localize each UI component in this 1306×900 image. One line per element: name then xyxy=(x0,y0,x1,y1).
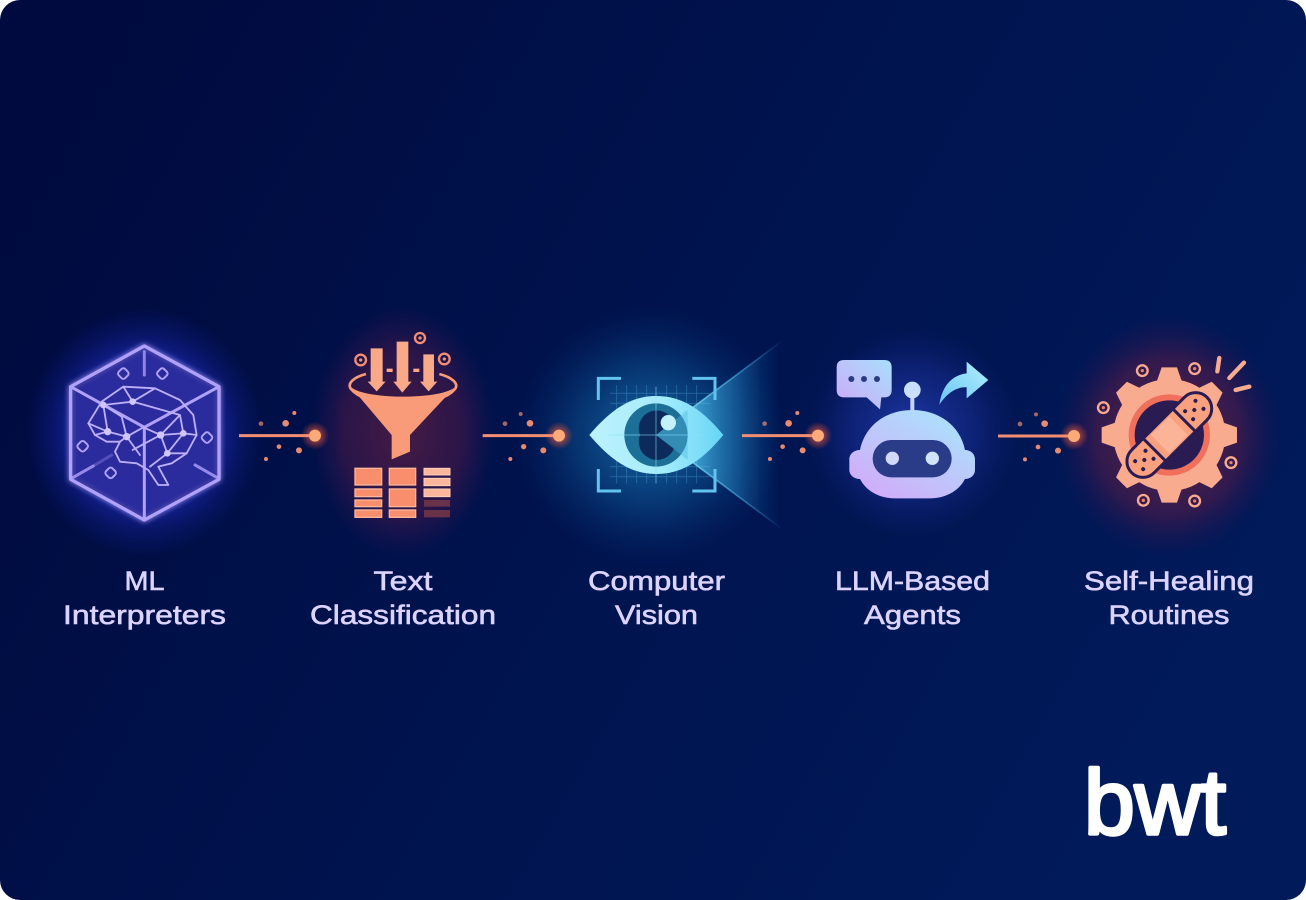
arrow: connector 4 xyxy=(998,412,1088,461)
small rings xyxy=(1098,363,1236,506)
label: Self-Healing Routines: Self-Healing xyxy=(1084,566,1254,596)
icon: brain in cube xyxy=(26,308,262,556)
logo: bwt: bwt xyxy=(1084,752,1226,854)
icon: funnel and table xyxy=(311,306,495,558)
label: ML Interpreters: ML xyxy=(124,566,164,596)
label: Computer Vision: Computer xyxy=(588,566,725,596)
share arrow xyxy=(939,362,988,405)
label: Text Classification xyxy=(310,566,496,630)
scan brackets xyxy=(598,378,715,491)
label: LLM-Based Agents xyxy=(835,566,990,630)
label: ML Interpreters xyxy=(63,566,226,630)
label: Computer Vision: Vision xyxy=(615,600,698,630)
bandage xyxy=(1120,386,1218,484)
icon: eye with vision cone xyxy=(515,306,785,566)
arrow: connector 1 xyxy=(239,411,329,461)
funnel body xyxy=(351,387,455,459)
label: ML Interpreters: Interpreters xyxy=(63,600,226,630)
label: Computer Vision xyxy=(588,566,725,630)
head xyxy=(849,410,975,498)
eye shape xyxy=(589,396,723,474)
label: Self-Healing Routines: Routines xyxy=(1108,600,1230,630)
label: Text Classification: Classification xyxy=(310,600,496,630)
label: LLM-Based Agents: LLM-Based xyxy=(835,566,990,596)
arrow: connector 2 xyxy=(483,412,573,461)
speech bubble xyxy=(837,360,892,409)
vision cone xyxy=(656,340,783,530)
label: LLM-Based Agents: Agents xyxy=(864,600,961,630)
grid xyxy=(610,385,710,483)
label: Text Classification: Text xyxy=(374,566,433,596)
sparks xyxy=(1217,358,1249,390)
arrow: connector 3 xyxy=(742,411,832,461)
icon: robot agent xyxy=(807,327,1017,537)
antenna xyxy=(910,395,914,412)
label: Self-Healing Routines xyxy=(1084,566,1254,630)
icon: gear with bandage xyxy=(1057,316,1281,556)
